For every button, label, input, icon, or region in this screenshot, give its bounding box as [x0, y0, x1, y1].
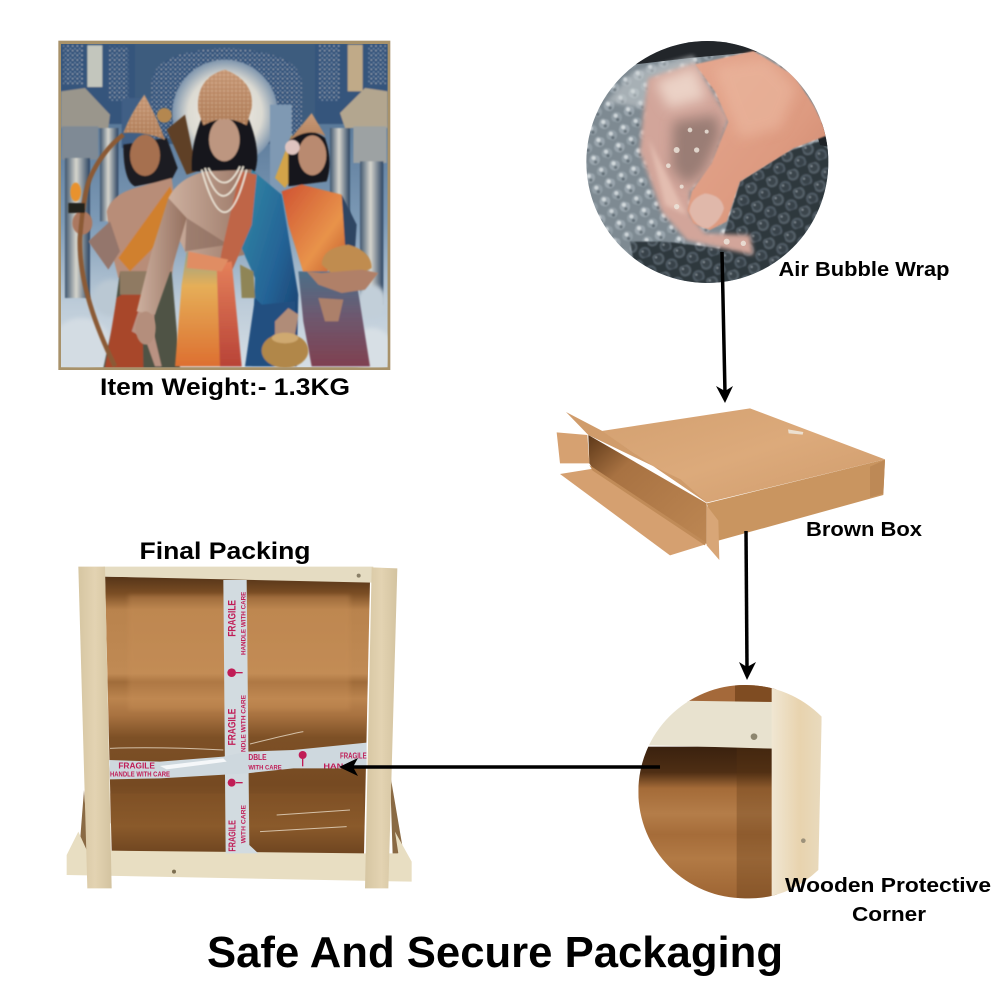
heading: final packing: Final Packing	[140, 538, 310, 565]
clouds	[53, 280, 393, 371]
fragile tape: vertical: FRAGILE	[226, 600, 238, 637]
caption: wooden protective corner	[785, 875, 991, 926]
panel: product artwork	[53, 41, 393, 371]
dark bubble wrap lower	[630, 139, 828, 283]
wooden frame	[67, 567, 412, 888]
arrow: bubble wrap to box	[716, 252, 733, 403]
arrow: corner to final packing	[339, 758, 660, 776]
fragile tape: vertical: FRAGILE	[226, 708, 238, 745]
hand	[687, 51, 828, 230]
dark background top	[636, 41, 758, 64]
arrow: box to corner	[739, 531, 756, 680]
bottom flap	[560, 469, 707, 555]
fragile tape: vertical: HANDLE WITH CARE	[240, 694, 247, 762]
box top	[602, 408, 885, 503]
figure: center with crown	[136, 70, 308, 368]
photo: brown box	[557, 408, 885, 560]
fragile tape: horizontal: HANDLE WITH CARE	[110, 770, 170, 779]
caption: air bubble wrap: Air Bubble Wrap	[778, 259, 950, 281]
title: Safe And Secure Packaging	[207, 928, 783, 977]
wrap highlights	[110, 732, 350, 832]
box side	[707, 459, 885, 541]
fragile tape: vertical: FRAGILE	[228, 820, 239, 852]
photo: air bubble wrap	[586, 41, 828, 283]
fragile tape: vertical: WITH CARE	[241, 804, 248, 843]
figure: right with pot	[275, 113, 378, 366]
cardboard	[105, 577, 370, 854]
front flap	[707, 505, 719, 560]
fragile tape: horizontal: DBLE	[248, 753, 267, 762]
caption: wooden protective corner: Corner	[852, 904, 926, 926]
thumbnail	[689, 193, 724, 228]
rear braces	[390, 773, 403, 855]
fragile tape: horizontal: WITH CARE	[248, 764, 282, 771]
fragile tape: vertical: HANDLE WITH CARE	[240, 591, 247, 655]
lid flap	[566, 412, 707, 503]
caption: brown box: Brown Box	[806, 519, 922, 541]
photo: final packing crate	[67, 567, 412, 888]
fragile tape: horizontal	[109, 743, 367, 779]
left small flap	[557, 432, 589, 463]
pale wrap top	[607, 55, 700, 108]
figure: left with bow	[68, 95, 180, 368]
hand seen through wrap	[640, 63, 753, 255]
box interior	[588, 435, 707, 544]
fragile tape: horizontal: FRAGILE	[340, 751, 367, 761]
caption: item weight: Item Weight:- 1.3KG	[100, 374, 350, 401]
box label	[788, 429, 803, 435]
fragile tape: horizontal: HAN	[323, 762, 343, 771]
fragile tape: horizontal: FRAGILE	[118, 760, 155, 770]
photo: wooden protective corner	[638, 685, 822, 898]
fragile tape: vertical	[223, 580, 258, 853]
bubble highlights in hand	[666, 128, 746, 246]
caption: wooden protective corner: Wooden Protective	[785, 875, 991, 897]
temple architecture	[61, 44, 388, 305]
